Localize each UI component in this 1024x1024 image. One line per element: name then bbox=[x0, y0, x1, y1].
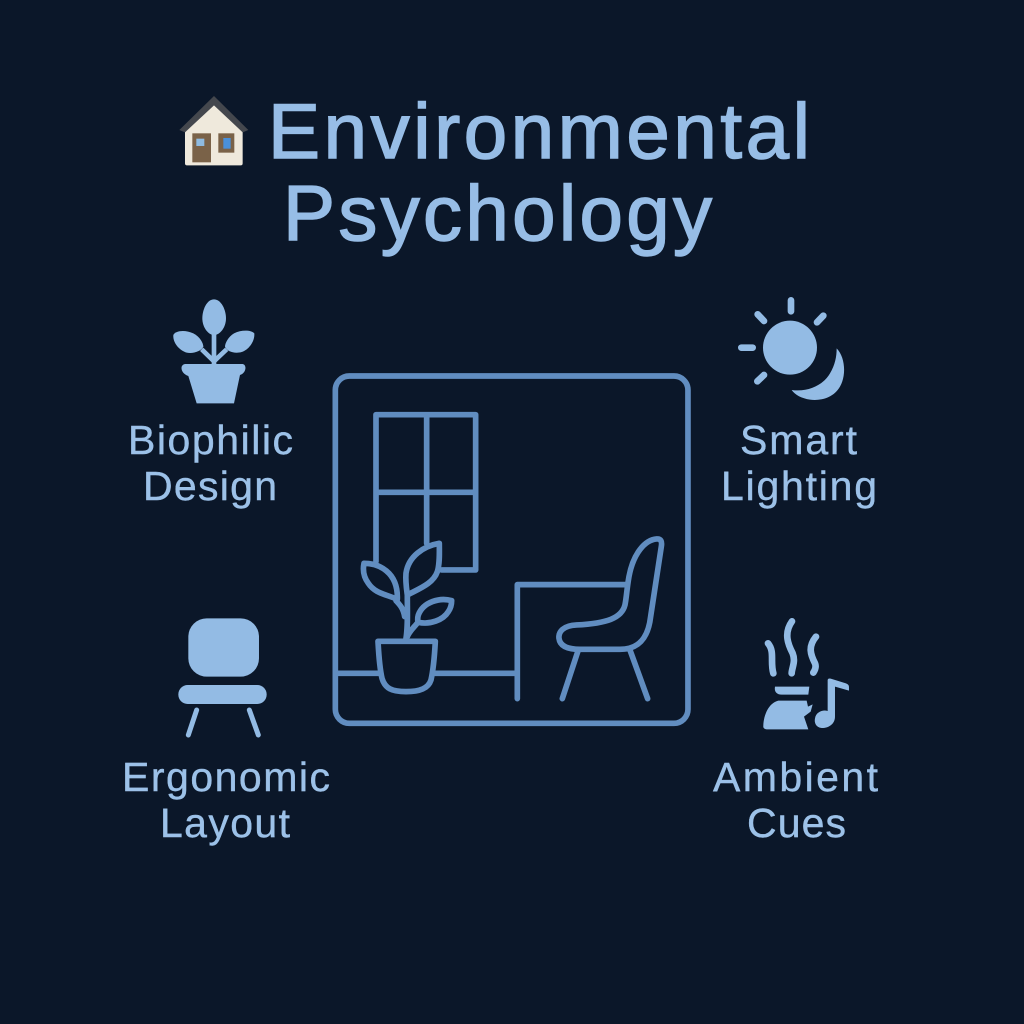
panel: smart lighting: Lighting bbox=[721, 463, 877, 509]
icon: steam, diffuser and music note bbox=[763, 621, 849, 729]
panel: ergonomic layout: Layout bbox=[160, 800, 291, 846]
label: Ergonomic bbox=[122, 754, 330, 800]
panel: biophilic design: Design bbox=[143, 463, 277, 509]
icon: potted plant bbox=[173, 299, 254, 403]
title line 1: Environmental bbox=[268, 87, 810, 175]
window bbox=[376, 415, 476, 570]
label: Ambient bbox=[713, 754, 879, 800]
label: Smart bbox=[740, 417, 858, 463]
room frame bbox=[335, 376, 688, 723]
label: Biophilic bbox=[128, 417, 293, 463]
central room illustration bbox=[335, 376, 688, 723]
plant bbox=[363, 543, 452, 692]
title bbox=[179, 87, 810, 257]
icon: lounge chair bbox=[178, 618, 267, 735]
panel: ambient cues bbox=[713, 621, 879, 846]
icon: sun and moon bbox=[741, 300, 844, 400]
panel: biophilic design bbox=[128, 299, 293, 509]
title line 2: Psychology bbox=[283, 169, 712, 257]
icon: house emoji bbox=[179, 96, 248, 165]
panel: ambient cues: Cues bbox=[747, 800, 846, 846]
chair bbox=[559, 539, 662, 699]
floor and desk bbox=[337, 585, 626, 699]
panel: ergonomic layout bbox=[122, 618, 330, 846]
panel: smart lighting bbox=[721, 300, 877, 509]
